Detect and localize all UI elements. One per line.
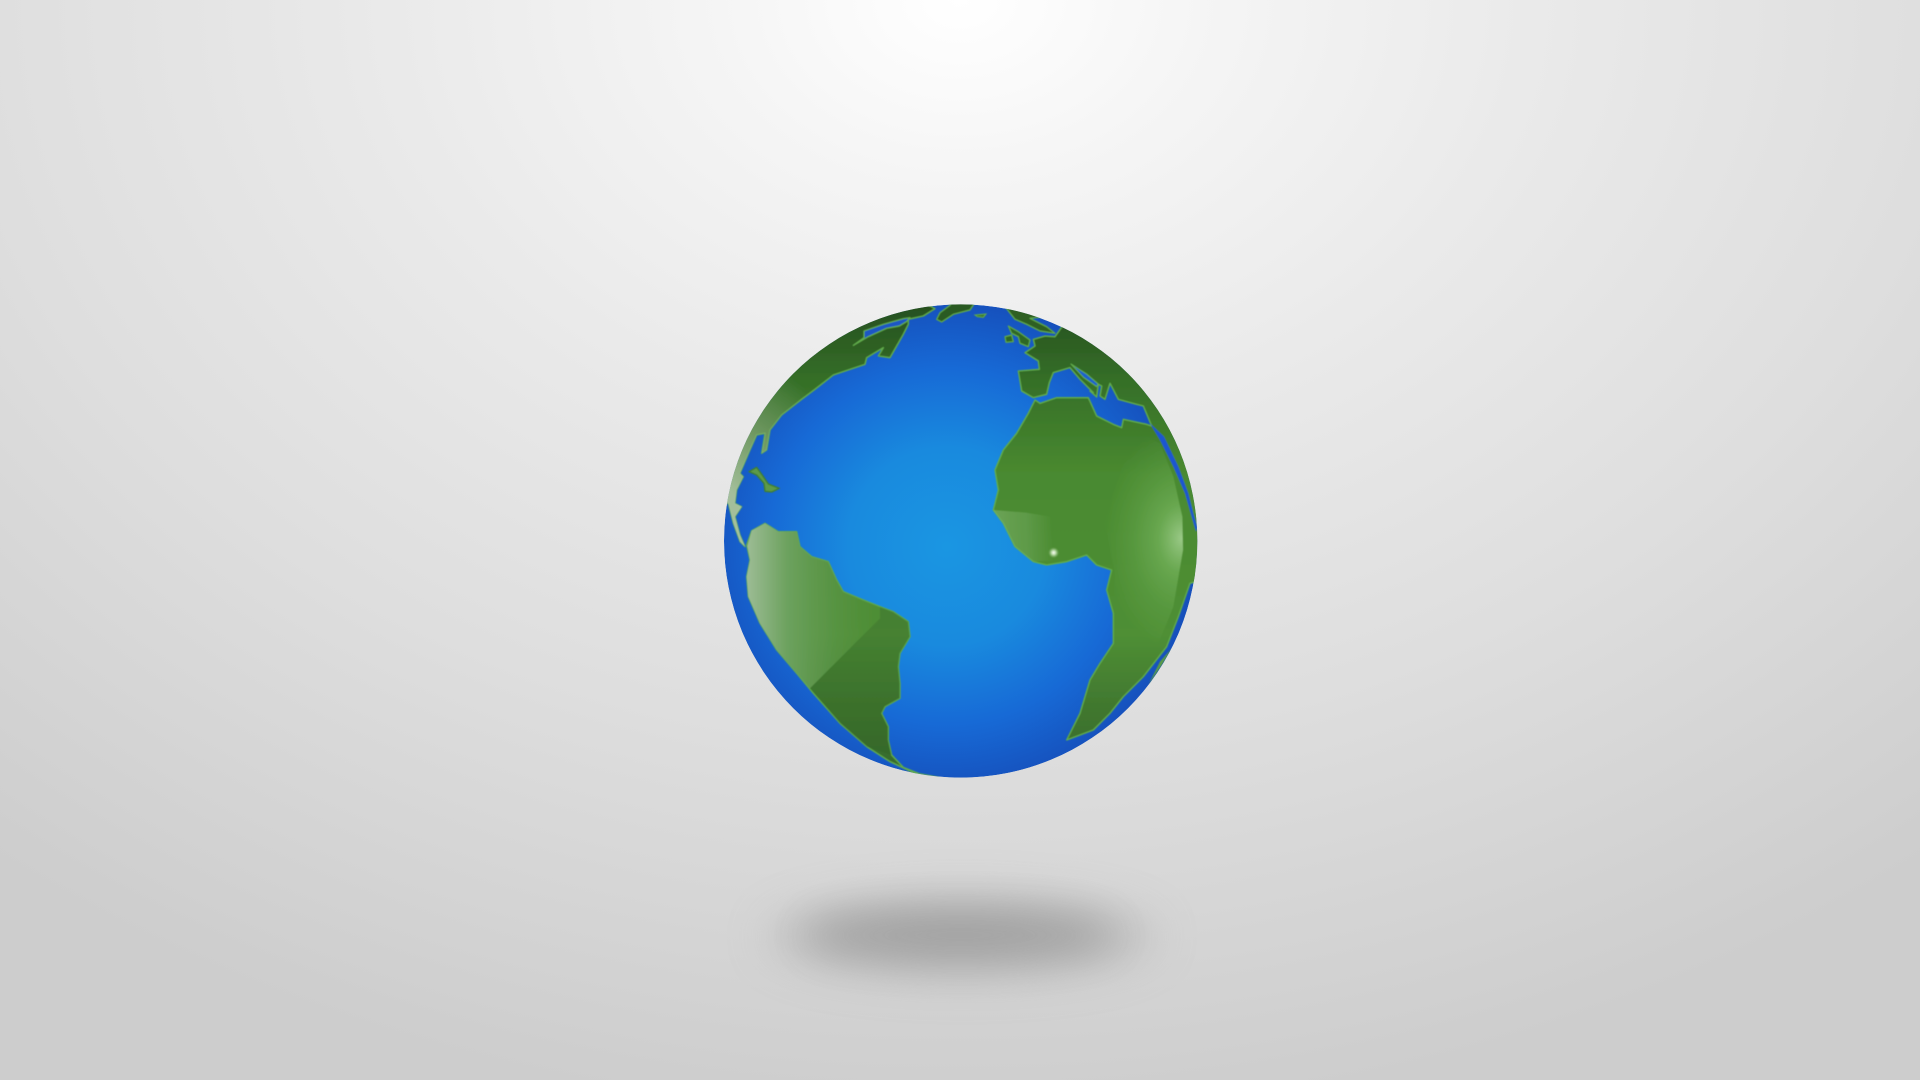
greenland xyxy=(937,300,977,322)
hudson bay xyxy=(853,318,910,345)
lower south america shade xyxy=(810,607,910,755)
west africa facet highlight xyxy=(994,510,1045,562)
illustration: floating globe and shadow xyxy=(724,304,1198,990)
ocean sphere xyxy=(724,304,1197,778)
scandinavia xyxy=(1005,303,1055,333)
south america xyxy=(747,523,938,777)
andes facet highlight xyxy=(746,523,850,688)
africa right limb highlight xyxy=(1124,456,1184,614)
british isles xyxy=(1005,326,1030,347)
madagascar sliver xyxy=(1148,648,1172,685)
globe xyxy=(724,304,1198,778)
caribbean islands xyxy=(749,467,779,492)
ground shadow below globe xyxy=(767,895,1157,979)
adriatic xyxy=(1071,364,1098,387)
north america limb highlight xyxy=(727,383,800,546)
red sea xyxy=(1150,423,1197,532)
specular glint xyxy=(1048,547,1059,558)
north america xyxy=(710,297,935,547)
eurasia and africa xyxy=(993,310,1233,740)
